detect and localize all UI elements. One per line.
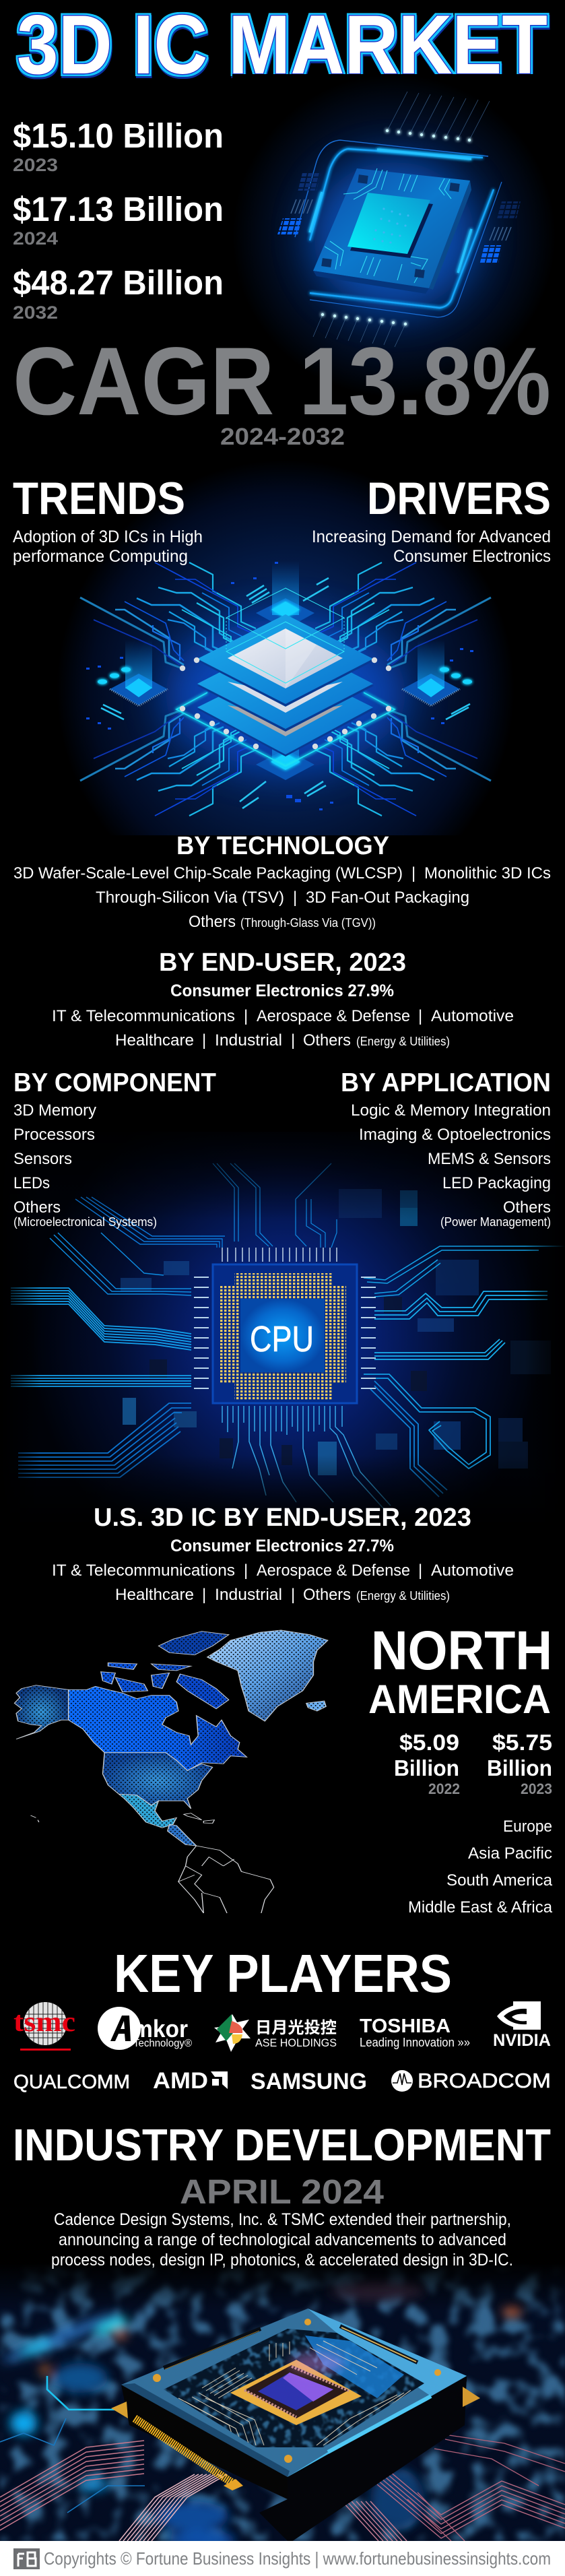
component list: Processors	[13, 1126, 95, 1144]
end-user list: |	[244, 1561, 248, 1580]
logo: NVIDIA	[493, 2001, 551, 2050]
map: North America	[14, 1630, 328, 1913]
logo: Amkor	[98, 2007, 192, 2050]
date: APRIL 2024	[180, 2172, 385, 2211]
application list: Others	[503, 1198, 551, 1217]
other regions: Europe	[503, 1817, 552, 1836]
CPU package	[213, 1264, 357, 1403]
end-user list: |	[418, 1561, 422, 1580]
small chip bottom	[256, 741, 314, 780]
heading: U.S. 3D IC BY END-USER, 2023	[94, 1504, 471, 1532]
panel: trends: performance Computing	[13, 547, 188, 566]
logo: Toshiba: Leading Innovation »»	[360, 2036, 470, 2049]
value 2032: $48.27 Billion	[13, 263, 224, 302]
panel: drivers: Consumer Electronics	[393, 547, 551, 566]
side block details	[297, 173, 321, 191]
end-user list: Aerospace & Defense	[257, 1007, 410, 1025]
illustration: chip on motherboard	[0, 2263, 565, 2549]
CAGR period: 2024-2032	[220, 424, 345, 450]
CPU label: CPU	[250, 1319, 314, 1359]
component list: (Microelectronical Systems)	[13, 1215, 157, 1229]
value 2023: 2023	[521, 1780, 552, 1797]
end-user list: |	[202, 1031, 206, 1050]
chip opening with circuits	[164, 2329, 424, 2447]
board components	[121, 1189, 551, 1475]
land fills	[14, 1630, 328, 1846]
logo: Fortune Business Insights	[13, 2548, 40, 2569]
logo: ASE Holdings: ASE HOLDINGS	[255, 2036, 337, 2049]
component list: Sensors	[13, 1150, 72, 1168]
panel: by technology	[13, 832, 551, 931]
frame slots	[164, 2329, 261, 2368]
year 2032: 2032	[13, 302, 58, 323]
logo: ASE Holdings: 日月光投控	[255, 2019, 337, 2037]
logo: ASE Holdings	[214, 2014, 337, 2052]
year 2023: 2023	[13, 155, 58, 175]
end-user list: Others	[303, 1031, 351, 1050]
circuit traces on chip	[325, 168, 451, 283]
panel: North America figures: AMERICA	[368, 1677, 551, 1722]
chip base	[313, 168, 470, 288]
heading: NORTH	[371, 1620, 552, 1681]
end-user list	[52, 1007, 514, 1050]
end-user list: Aerospace & Defense	[257, 1561, 410, 1580]
pins top	[387, 92, 490, 140]
application list: MEMS & Sensors	[428, 1150, 551, 1168]
technology list	[13, 864, 551, 931]
cyan base outline	[176, 693, 395, 766]
logo: Qualcomm: QUALCOMM	[13, 2071, 130, 2093]
die	[350, 197, 433, 258]
fade edges	[0, 1118, 565, 1219]
value 2023: $15.10 Billion	[13, 117, 224, 155]
application list: (Power Management)	[440, 1215, 551, 1229]
technology list: (Through-Glass Via (TGV))	[240, 916, 376, 930]
halftone and borders	[14, 1630, 328, 1846]
end-user list: |	[291, 1031, 295, 1050]
layer 3	[197, 664, 374, 756]
end-user list: |	[202, 1586, 206, 1604]
illustration: stacked chip layers and circuits	[0, 458, 565, 835]
description: Cadence Design Systems, Inc. & TSMC extended their partnership,	[54, 2210, 511, 2229]
end-user list: IT & Telecommunications	[52, 1561, 235, 1580]
layer 2	[197, 639, 374, 732]
end-user list: Automotive	[431, 1561, 514, 1580]
traces	[0, 2376, 565, 2541]
wireframe	[226, 588, 344, 683]
panel: by application	[341, 1068, 551, 1229]
end-user list: |	[291, 1586, 295, 1604]
value 2024: $17.13 Billion	[13, 190, 224, 228]
panel: by component	[13, 1068, 216, 1229]
application list: Logic & Memory Integration	[351, 1101, 551, 1120]
value 2023: $5.75	[492, 1730, 552, 1755]
panel: North America figures	[368, 1620, 553, 1917]
heading: drivers: DRIVERS	[367, 473, 551, 524]
end-user list: Healthcare	[115, 1031, 194, 1050]
drivers text: Increasing Demand for Advanced	[312, 527, 551, 546]
end-user list: Industrial	[215, 1586, 282, 1604]
end-user list: (Energy & Utilities)	[356, 1589, 450, 1603]
glowing ovals	[98, 667, 472, 684]
end-user list: Automotive	[431, 1007, 514, 1025]
year 2024: 2024	[13, 228, 58, 249]
gold comb	[135, 2418, 234, 2484]
top pins	[222, 1248, 337, 1262]
board traces	[11, 1163, 565, 1509]
value 2023	[487, 1730, 552, 1797]
value 2022: Billion	[394, 1756, 459, 1780]
decorative stripes	[101, 578, 470, 808]
illustration: CPU circuit board	[0, 1118, 565, 1529]
end-user list: |	[418, 1007, 422, 1025]
panel: by end-user 2023	[52, 948, 514, 1050]
technology list: Through-Silicon Via (TSV)	[96, 889, 284, 907]
logo: Amkor: Technology®	[133, 2038, 192, 2049]
other regions: Middle East & Africa	[408, 1898, 553, 1917]
trends text: Adoption of 3D ICs in High	[13, 527, 203, 546]
illustration: glowing chip	[232, 74, 556, 397]
heading: BY TECHNOLOGY	[176, 832, 389, 860]
end-user list: |	[244, 1007, 248, 1025]
other regions: South America	[446, 1871, 553, 1890]
circuit traces	[80, 562, 491, 816]
application list: Imaging & Optoelectronics	[359, 1126, 551, 1144]
heading: BY COMPONENT	[13, 1068, 216, 1097]
heading: trends: TRENDS	[13, 473, 185, 524]
description	[51, 2210, 513, 2269]
scatter dots	[86, 562, 473, 810]
layer 1 top	[197, 614, 374, 707]
small chip right	[402, 640, 460, 706]
soft board texture	[0, 2263, 565, 2541]
technology list: 3D Fan-Out Packaging	[306, 889, 469, 907]
logo: Amkor: mkor	[133, 2015, 188, 2042]
South America and islands outline	[30, 1813, 274, 1913]
component list: LEDs	[13, 1174, 50, 1192]
bright glow arcs	[310, 150, 471, 273]
leading segment: Consumer Electronics 27.9%	[170, 981, 394, 1000]
heading: BY APPLICATION	[341, 1068, 551, 1097]
technology list: |	[293, 889, 297, 907]
logo: Broadcom: BROADCOM	[418, 2069, 551, 2092]
logo: Toshiba	[360, 2016, 470, 2049]
pins bottom	[313, 315, 405, 347]
logos: key players	[13, 2001, 551, 2094]
die	[240, 1299, 325, 1372]
technology list: Others	[189, 913, 236, 931]
gold lid	[230, 2360, 362, 2425]
small chip top	[256, 561, 314, 629]
small chip left	[110, 640, 168, 706]
end-user list: Others	[303, 1586, 351, 1604]
end-user list	[52, 1561, 514, 1604]
corner screws	[153, 2319, 441, 2463]
logo: tsmc	[13, 2002, 75, 2051]
chip frame	[121, 2309, 467, 2477]
logo: Toshiba: TOSHIBA	[360, 2016, 451, 2037]
panel: drivers	[312, 473, 551, 566]
leading segment: Consumer Electronics 27.7%	[170, 1537, 394, 1555]
heading: key players: KEY PLAYERS	[114, 1943, 452, 2003]
other regions: Asia Pacific	[468, 1844, 552, 1863]
chip body side	[121, 2376, 467, 2499]
description: process nodes, design IP, photonics, & accelerated design in 3D-IC.	[51, 2251, 513, 2269]
panel: U.S. by end-user	[52, 1504, 514, 1604]
heading: BY END-USER, 2023	[159, 948, 406, 977]
value 2023: Billion	[487, 1756, 552, 1780]
description: announcing a range of technological advancements to advanced	[59, 2230, 506, 2249]
component list	[13, 1101, 157, 1229]
panel: market size figures	[13, 117, 224, 323]
frame lines	[295, 140, 502, 317]
component list: 3D Memory	[13, 1101, 96, 1120]
blurred background lights	[0, 2281, 521, 2549]
application list: LED Packaging	[442, 1174, 551, 1192]
logo: NVIDIA: NVIDIA	[493, 2031, 551, 2050]
logo: tsmc: tsmc	[13, 2007, 75, 2038]
end-user list: Healthcare	[115, 1586, 194, 1604]
other regions	[408, 1817, 553, 1917]
end-user list: Industrial	[215, 1031, 282, 1050]
value 2022: 2022	[428, 1780, 460, 1797]
purple die	[258, 2373, 333, 2410]
logo: Samsung: SAMSUNG	[251, 2069, 367, 2094]
end-user list: IT & Telecommunications	[52, 1007, 235, 1025]
value 2022	[394, 1730, 460, 1797]
technology list: Monolithic 3D ICs	[424, 864, 551, 882]
footer	[0, 2541, 565, 2576]
panel: trends	[13, 473, 203, 566]
panel: industry development	[13, 2120, 551, 2269]
end-user list: (Energy & Utilities)	[356, 1035, 450, 1048]
application list	[351, 1101, 551, 1229]
technology list: |	[411, 864, 416, 882]
logo: AMD	[153, 2068, 228, 2094]
component list: Others	[13, 1198, 61, 1217]
solder dot grid	[220, 1273, 346, 1400]
value 2022: $5.09	[399, 1730, 459, 1755]
side pins	[194, 1277, 376, 1389]
logo: AMD: AMD	[153, 2068, 208, 2094]
connector dots	[180, 657, 391, 749]
technology list: 3D Wafer-Scale-Level Chip-Scale Packaging (WLCSP)	[13, 864, 403, 882]
